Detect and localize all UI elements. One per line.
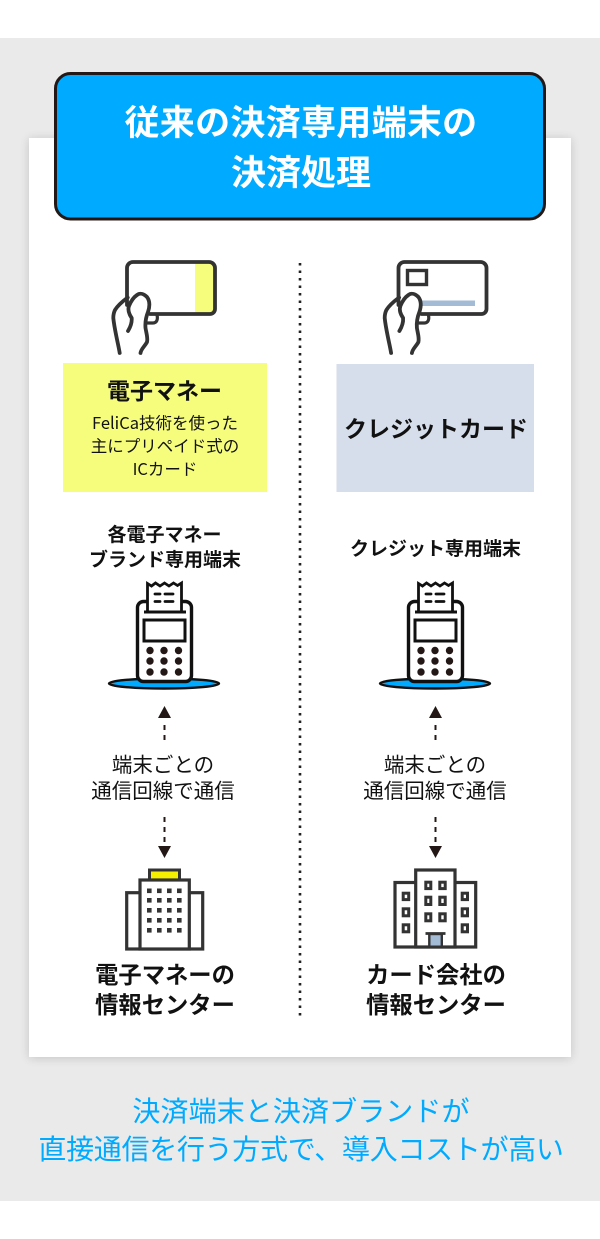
title banner: 従来の決済専用端末の xyxy=(124,104,478,143)
icon: card company building xyxy=(395,870,476,947)
footer summary xyxy=(38,1096,564,1165)
panel: credit card label: クレジットカード xyxy=(344,416,528,442)
text: communication left: 端末ごとの xyxy=(112,754,214,777)
text: communication left xyxy=(91,754,235,803)
heading: e-money info center: 情報センター xyxy=(95,992,235,1018)
heading: e-money info center: 電子マネーの xyxy=(95,962,235,988)
text: communication right xyxy=(363,754,507,803)
footer summary: 決済端末と決済ブランドが xyxy=(132,1096,470,1127)
arrow: down to card company center xyxy=(429,817,442,858)
heading: e-money terminal: ブランド専用端末 xyxy=(89,548,241,571)
panel: e-money label: 電子マネー xyxy=(107,378,222,404)
heading: card company info center: 情報センター xyxy=(366,992,506,1018)
heading: e-money terminal xyxy=(89,523,241,571)
panel: e-money label xyxy=(63,363,267,492)
text: communication right: 通信回線で通信 xyxy=(363,780,507,803)
heading: e-money info center xyxy=(95,962,235,1018)
panel: e-money label: FeliCa技術を使った xyxy=(92,410,238,434)
icon: hand holding credit card xyxy=(385,262,486,353)
arrow: up to e-money terminal xyxy=(158,706,171,745)
icon: credit payment terminal xyxy=(380,583,490,688)
footer summary: 直接通信を行う方式で、導入コストが高い xyxy=(38,1134,564,1165)
panel: white comparison card xyxy=(29,138,571,1058)
arrow: down to e-money center xyxy=(158,817,171,858)
text: communication right: 端末ごとの xyxy=(384,754,486,777)
panel: credit card label xyxy=(336,364,534,492)
center dotted divider xyxy=(299,263,301,1016)
icon: e-money payment terminal xyxy=(109,583,219,688)
heading: e-money terminal: 各電子マネー xyxy=(107,523,222,546)
icon: e-money data center building xyxy=(127,870,203,949)
heading: credit terminal: クレジット専用端末 xyxy=(350,538,521,560)
title banner xyxy=(56,74,544,219)
icon: hand holding e-money card xyxy=(113,262,215,353)
heading: card company info center: カード会社の xyxy=(366,962,506,988)
text: communication left: 通信回線で通信 xyxy=(91,780,235,803)
panel: e-money label: 主にプリペイド式の xyxy=(91,433,239,457)
panel: e-money label: ICカード xyxy=(133,456,197,480)
arrow: up to credit terminal xyxy=(429,706,442,745)
title banner: 決済処理 xyxy=(231,154,371,193)
heading: card company info center xyxy=(366,962,506,1018)
